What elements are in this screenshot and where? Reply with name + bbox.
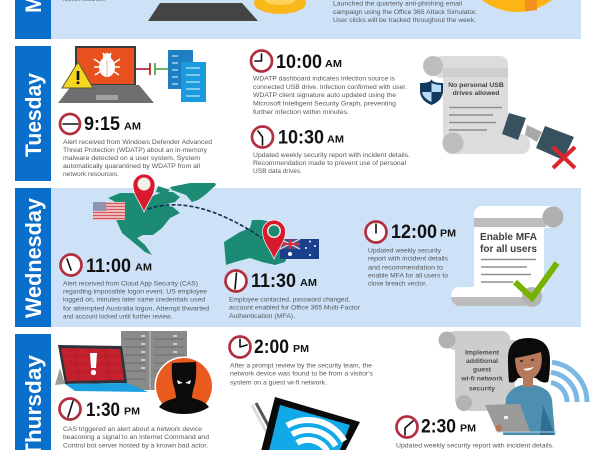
icon: MFA scroll xyxy=(451,206,564,307)
scroll text: wi-fi network xyxy=(460,376,503,382)
text: weekly report: Recommendation made to prevent use of personal xyxy=(253,160,407,167)
time: 2:00 PM: 2:00 xyxy=(254,336,289,358)
scroll text line 2: drives allowed xyxy=(453,90,499,97)
scroll text: guest xyxy=(473,366,492,374)
map: Australia xyxy=(224,220,290,265)
time: 12:00 PM: PM xyxy=(440,228,456,240)
time: 2:30 PM: PM xyxy=(460,422,476,434)
flag: United States xyxy=(93,202,125,220)
icon: USB stick crossed out xyxy=(502,113,575,168)
text: phishing campaign: User clicks will be tracked throughout the week. xyxy=(333,17,476,24)
time: 10:00 AM: 10:00 xyxy=(276,51,322,73)
text: MFA recommendation: report with incident details xyxy=(368,256,449,262)
icon: bait coin xyxy=(254,0,306,14)
clock: 10:00 AM xyxy=(251,50,272,72)
time: 1:30 PM: PM xyxy=(124,406,140,418)
text: infection source: Microsoft Intelligent Security Graph, preventing xyxy=(253,100,396,108)
text: infection source xyxy=(253,76,407,116)
text: employee contacted: Authentication (MFA). xyxy=(229,313,295,320)
text: weekly report update: Updated weekly security report with incident details. xyxy=(396,442,554,450)
clock: 11:00 AM xyxy=(60,254,82,276)
clock: 12:00 PM xyxy=(366,222,386,242)
text: MFA recommendation: close breach vector. xyxy=(368,280,427,288)
icon: tablet alert xyxy=(55,345,148,392)
clock: 1:30 PM xyxy=(60,398,80,420)
time: 11:30 AM: 11:30 xyxy=(251,270,296,292)
text: network beacon xyxy=(63,426,209,450)
clock: 2:00 PM xyxy=(230,336,250,358)
text: impossible logon: regarding impossible logon event. US employee xyxy=(63,288,207,296)
text: weekly report xyxy=(253,152,410,175)
text: weekly report: USB data drives. xyxy=(253,168,302,175)
scroll text xyxy=(460,350,503,392)
time: 9:15 AM: AM xyxy=(124,120,141,132)
clock: 9:15 AM xyxy=(60,114,80,134)
text: MFA recommendation: and recommendation to xyxy=(368,264,443,272)
scroll text: additional xyxy=(466,358,498,365)
alert exclamation xyxy=(90,353,97,375)
heading: Wednesday: Wednesday xyxy=(21,197,46,318)
text: impossible logon: Alert received from Cloud App Security (CAS) xyxy=(63,280,198,288)
time: 1:30 PM: 1:30 xyxy=(86,399,120,421)
route: dashed arc xyxy=(148,205,262,238)
text: impossible logon: and account locked until further review. xyxy=(63,314,172,320)
text: employee contacted: account enabled for Office 365 Multi-Factor xyxy=(229,304,361,312)
text: impossible logon xyxy=(63,280,209,320)
text: impossible logon: logged on, minutes later same credentials used xyxy=(63,296,205,304)
panel: Tuesday xyxy=(15,46,575,181)
panel: Thursday xyxy=(15,331,587,450)
time: 9:15 AM: 9:15 xyxy=(84,113,120,135)
text: visitor device: network device was found to be from a visitor's xyxy=(230,370,374,378)
text: Defender alert xyxy=(63,139,212,178)
map: North America xyxy=(108,183,216,255)
text: weekly report: Updated weekly security report with incident details. xyxy=(253,152,410,159)
time: 11:00 AM: 11:00 xyxy=(86,255,131,277)
scroll heading: Enable MFA xyxy=(480,231,537,243)
time: 10:30 AM: AM xyxy=(327,134,344,146)
time: 10:30 AM: 10:30 xyxy=(278,126,324,148)
panel: Wednesday xyxy=(15,174,581,327)
text: MFA recommendation: enable MFA for all users to xyxy=(368,272,448,280)
text: infection source: WDATP client signature auto updated using the xyxy=(253,92,396,99)
panel: Monday xyxy=(15,0,581,39)
text: visitor device: After a prompt review by the security team, the xyxy=(230,362,372,370)
time: 12:00 PM: 12:00 xyxy=(391,221,437,243)
time: 11:00 AM: AM xyxy=(135,262,152,274)
scroll text: security xyxy=(469,386,495,392)
text: visitor device: system on a guest wi-fi network. xyxy=(230,380,327,386)
clock: 10:30 AM xyxy=(252,126,273,148)
text: infection source: connected USB drive. Infection confirmed with user. xyxy=(253,84,407,91)
text: phishing campaign: Launched the quarterly anti-phishing email xyxy=(333,0,463,8)
pin: Australia xyxy=(262,220,286,259)
text: infection source: WDATP dashboard indicates infection source is xyxy=(253,76,396,82)
icon: network security scroll xyxy=(438,331,524,411)
text: MFA recommendation: Updated weekly security xyxy=(368,248,442,254)
text: phishing campaign: campaign using the Office 365 Attack Simulator. xyxy=(333,9,477,16)
heading: Tuesday: Tuesday xyxy=(21,72,46,157)
text: employee contacted: Employee contacted, password changed, xyxy=(229,296,350,304)
text: Defender alert: Threat Protection (WDATP) about an in-memory xyxy=(63,147,208,154)
icon: server rack xyxy=(121,331,187,390)
icon: phishing hook disc xyxy=(460,0,574,12)
text: network beacon: CAS triggered an alert about a network device xyxy=(63,426,202,433)
icon: shield xyxy=(420,79,443,105)
time: 2:00 PM: PM xyxy=(293,343,309,355)
icon: wi-fi waves xyxy=(551,362,587,402)
icon: blocked connection xyxy=(136,63,168,75)
text: impossible logon: for attempted Australia logon. Attempt thwarted xyxy=(63,306,209,312)
text: Defender alert: network resources. xyxy=(63,171,119,178)
text: infection source: further infection within minutes. xyxy=(253,109,349,116)
time: 11:30 AM: AM xyxy=(300,277,317,289)
pin: United States xyxy=(133,174,155,212)
icon: wi-fi tablet and stylus xyxy=(252,397,360,450)
icon: infected laptop xyxy=(58,46,154,103)
text: phishing campaign xyxy=(333,0,477,24)
icon: keyboard xyxy=(148,3,258,21)
text: employee contacted xyxy=(229,296,361,320)
time: 9:15 AM xyxy=(84,113,141,135)
icon: warning triangle xyxy=(62,62,93,88)
clock: 2:30 PM xyxy=(396,416,418,438)
time: 10:00 AM: AM xyxy=(325,58,342,70)
icon: USB policy scroll xyxy=(423,56,530,154)
text: Defender alert: malware detected on a user system. System xyxy=(63,155,201,162)
flag: Australia xyxy=(280,239,319,259)
scroll text: No personal USB xyxy=(448,82,504,89)
scroll heading line 2: for all users xyxy=(480,243,537,255)
scroll text: Implement xyxy=(465,350,500,356)
clock: 11:30 AM xyxy=(226,270,246,292)
text: network beacon: Control bot server hosted by a known bad actor. xyxy=(63,442,208,450)
illustration: woman with laptop xyxy=(485,338,557,435)
text: visitor device xyxy=(230,362,374,386)
icon: servers xyxy=(168,50,206,102)
text: Defender alert: Alert received from Windows Defender Advanced xyxy=(63,139,212,146)
icon: green check mark xyxy=(515,263,557,298)
icon: hacker avatar xyxy=(154,356,214,416)
text: network beacon: beaconing a signal to an Internet Command and xyxy=(63,434,209,441)
time: 2:30 PM: 2:30 xyxy=(421,416,456,438)
text: MFA recommendation xyxy=(368,248,449,288)
text: Defender alert: automatically quarantined by WDATP from all xyxy=(63,163,201,170)
